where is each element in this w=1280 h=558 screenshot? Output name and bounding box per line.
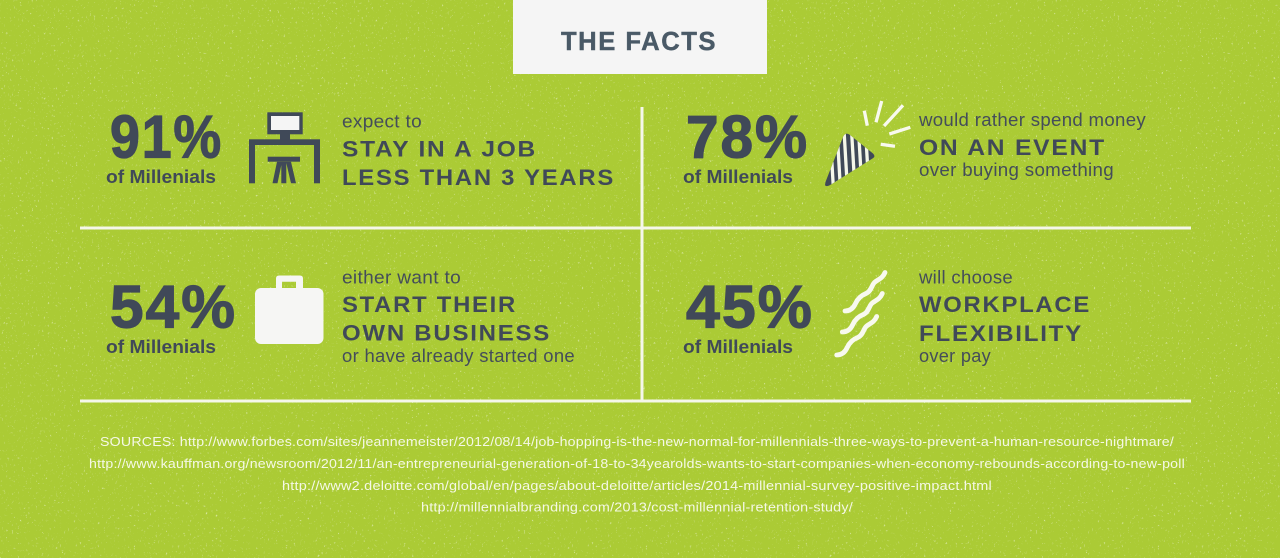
text: stay in a job [342,112,615,190]
stat: 91%: 91% [110,104,223,170]
icon: wavy lines [837,272,885,355]
sources: http://millennialbranding.com/2013/cost-millennial-retention-study/ [421,500,853,514]
text: workplace flexibility: FLEXIBILITY [919,321,1083,346]
label: of Millenials: of Millenials [683,167,793,187]
text: workplace flexibility: will choose [918,268,1013,288]
text: start their own business: or have already started one [342,346,575,366]
text: start their own business [342,268,575,366]
icon: party popper [825,101,910,190]
panel: 54% start a business [106,268,575,366]
text: workplace flexibility [918,268,1091,366]
panel: 91% stay in a job [106,104,615,190]
text: workplace flexibility: WORKPLACE [919,292,1091,317]
stat: 54%: 54% [110,274,237,340]
panel: 45% workplace flexibility [683,268,1091,366]
text: on an event [918,110,1146,180]
sources: http://www.kauffman.org/newsroom/2012/11/an-entrepreneurial-generation-of-18-to-34yearolds-wants-to-start-companies-when-economy-rebounds-according-to-new-poll [89,456,1185,471]
label: of Millenials: of Millenials [106,337,216,357]
label: of Millenials: of Millenials [106,167,216,187]
text: workplace flexibility: over pay [919,346,991,366]
stat: 45%: 45% [686,274,814,340]
text: stay in a job: STAY IN A JOB [342,136,537,162]
text: stay in a job: LESS THAN 3 YEARS [342,165,615,190]
text: on an event: over buying something [919,160,1114,180]
text: start their own business: OWN BUSINESS [342,320,551,346]
stat: 78%: 78% [686,104,809,170]
text: stay in a job: expect to [342,112,422,132]
text: on an event: would rather spend money [918,110,1146,130]
heading: the facts: THE FACTS [561,26,717,56]
icon: desk with computer [249,112,320,183]
sources [89,434,1185,514]
grid lines [80,107,1191,402]
text: start their own business: START THEIR [342,292,517,317]
text: on an event: ON AN EVENT [919,135,1106,160]
sources: http://www2.deloitte.com/global/en/pages/about-deloitte/articles/2014-millennial-survey-positive-impact.html [282,478,992,493]
icon: briefcase [255,276,324,344]
label: of Millenials: of Millenials [683,337,793,357]
sources: SOURCES: http://www.forbes.com/sites/jeannemeister/2012/08/14/job-hopping-is-the-new-normal-for-millennials-three-ways-to-prevent-a-human-resource-nightmare/ [100,434,1174,449]
panel: 78% spend on an event [683,101,1146,190]
text: start their own business: either want to [342,268,461,288]
title panel [513,0,767,74]
